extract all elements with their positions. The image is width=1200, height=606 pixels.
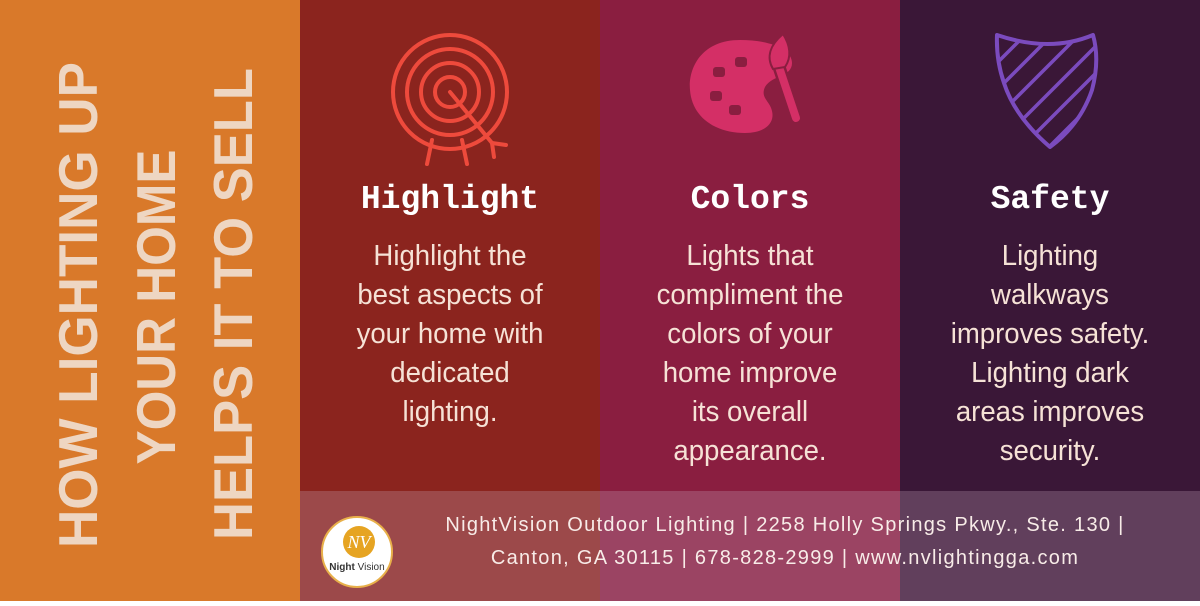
text block: appearance. (673, 435, 827, 467)
text block: home improve (663, 357, 837, 389)
icon: target (391, 33, 509, 166)
contact text: Canton, GA 30115 | 678-828-2999 | www.nvlightingga.com (491, 547, 1079, 569)
text block: compliment the (657, 279, 843, 311)
heading: Highlight (361, 181, 539, 218)
text block (356, 240, 543, 428)
logo: Night Vision (329, 562, 385, 573)
text block: your home with (357, 318, 543, 350)
title text: HELPS IT TO SELL (202, 68, 264, 540)
panel: title (0, 0, 300, 601)
logo: NV (347, 532, 370, 552)
icon: palette (690, 36, 800, 133)
text block: best aspects of (357, 279, 543, 311)
title text: YOUR HOME (125, 150, 187, 464)
text block: security. (1000, 435, 1100, 467)
panel: colors (600, 0, 900, 601)
heading: Safety (991, 181, 1109, 218)
text block: improves safety. (951, 318, 1149, 350)
text block: its overall (692, 396, 808, 428)
contact text: NightVision Outdoor Lighting | 2258 Holly Springs Pkwy., Ste. 130 | (445, 514, 1125, 536)
text block: Highlight the (373, 240, 527, 272)
footer band (300, 491, 1200, 601)
text block (657, 240, 843, 467)
text block: Lights that (686, 240, 814, 272)
panel: safety (900, 0, 1200, 601)
text block: Lighting dark (971, 357, 1129, 389)
panel: highlight (300, 0, 600, 601)
title text: HOW LIGHTING UP (47, 62, 109, 548)
title text (47, 62, 264, 548)
text block: dedicated (390, 357, 510, 389)
contact text (445, 514, 1125, 569)
text block: lighting. (403, 396, 497, 428)
text block (951, 240, 1149, 467)
icon: shield (994, 32, 1098, 149)
text block: areas improves (956, 396, 1144, 428)
logo (321, 516, 393, 588)
heading: Colors (691, 181, 809, 218)
text block: walkways (991, 279, 1109, 311)
text block: colors of your (667, 318, 833, 350)
text block: Lighting (1002, 240, 1098, 272)
